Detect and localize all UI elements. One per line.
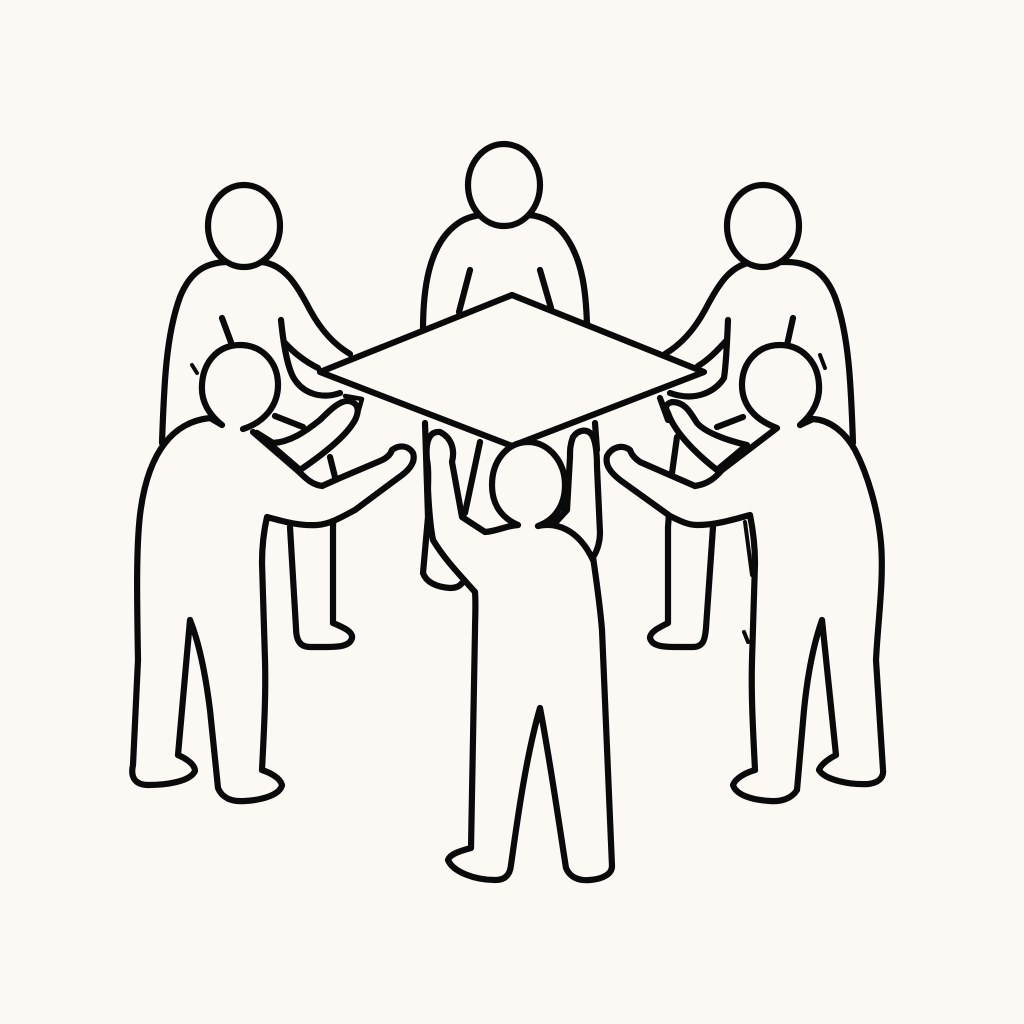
diamond panel	[320, 295, 704, 446]
head	[727, 185, 799, 267]
arm and waist lines	[660, 318, 793, 427]
head	[468, 144, 540, 226]
head	[492, 442, 565, 526]
stray pen marks	[744, 355, 825, 642]
head	[208, 185, 280, 267]
pen tick	[192, 365, 197, 373]
figure: back left person	[162, 185, 352, 647]
shoulders outline	[423, 215, 587, 330]
hand edge	[345, 396, 362, 420]
head	[202, 345, 278, 429]
body outline	[665, 262, 853, 443]
leg	[290, 457, 352, 647]
body and lower arm outline	[132, 418, 414, 801]
figure: front left person	[132, 345, 414, 801]
figure: front right person	[607, 345, 883, 801]
body outline	[162, 262, 350, 443]
second shoulder line	[563, 455, 571, 520]
body and raised arms outline	[427, 431, 612, 880]
leg and inner lines	[423, 423, 480, 588]
arm lines	[459, 270, 551, 312]
upper arm reaching the panel	[666, 402, 747, 470]
figure: front centre person	[427, 423, 612, 880]
body and lower arm outline	[607, 419, 883, 801]
right shoulder	[538, 423, 597, 560]
leg	[650, 437, 713, 647]
upper arm reaching the panel	[257, 401, 358, 470]
figure: top centre person	[423, 144, 587, 588]
arm and waist lines	[222, 318, 340, 427]
head	[742, 345, 819, 428]
figure: back right person	[650, 185, 853, 647]
